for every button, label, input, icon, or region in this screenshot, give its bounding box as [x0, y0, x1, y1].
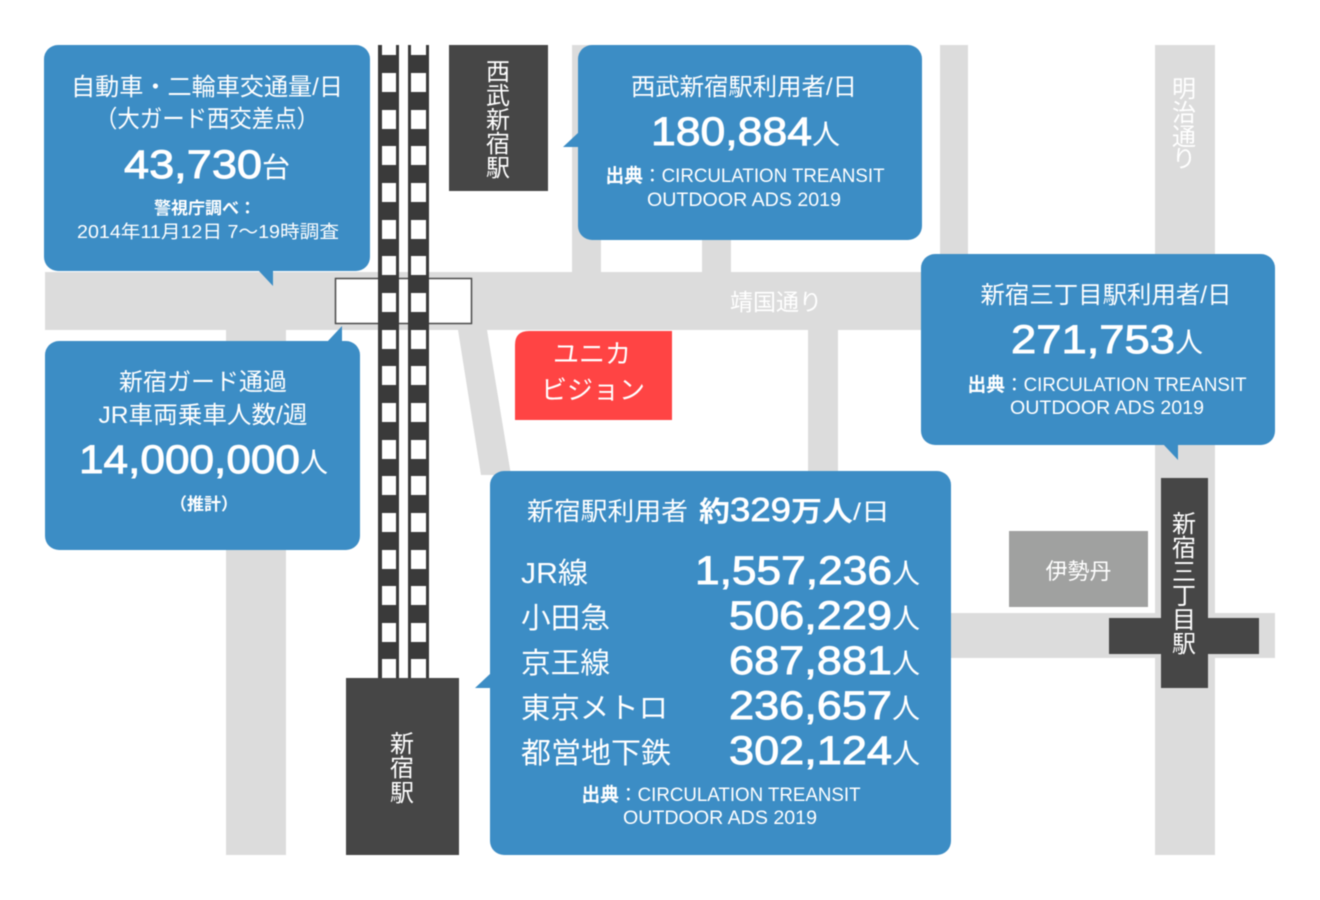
row: JR: 1,557,236 [695, 549, 892, 593]
panel: Seibu-Shinjuku callout: OUTDOOR ADS 2019 [647, 190, 841, 211]
row: Odakyu: 人 [892, 603, 920, 634]
panel: Seibu-Shinjuku callout [563, 45, 922, 240]
row: JR: JR線 [521, 557, 588, 590]
panel: road traffic callout: 警視庁調べ： [154, 199, 256, 218]
railway tracks [378, 45, 429, 678]
panel: Shinjuku-sanchome callout: OUTDOOR ADS 2019 [1010, 398, 1204, 419]
panel: Shinjuku-sanchome callout: 271,753 [1011, 318, 1175, 362]
row: Keio: 京王線 [521, 647, 610, 680]
panel: road traffic callout: 台 [262, 152, 290, 183]
heading: Shinjuku station daily users: 新宿駅利用者 [527, 498, 688, 526]
station: Shinjuku-sanchome: 丁 [1172, 583, 1196, 610]
station: Seibu-Shinjuku: 宿 [486, 131, 510, 158]
road label: Meiji-dori: り [1172, 146, 1196, 173]
panel: Seibu-Shinjuku callout: 180,884 [651, 110, 812, 154]
panel: road traffic callout: （大ガード西交差点） [95, 106, 319, 133]
building: Isetan [1009, 531, 1148, 607]
panel: road traffic callout: 2014年11月12日 7〜19時調査 [77, 222, 339, 242]
station: Shinjuku-sanchome: 新 [1172, 511, 1196, 538]
row: Odakyu: 506,229 [729, 594, 892, 638]
road label: Meiji-dori: 通 [1172, 124, 1196, 151]
panel: JR passengers callout: 14,000,000 [79, 438, 300, 482]
station: Shinjuku-sanchome [1109, 478, 1259, 688]
location: Unica Vision [515, 331, 672, 420]
row: Odakyu [521, 594, 920, 638]
station: Seibu-Shinjuku [449, 45, 548, 191]
heading: Shinjuku station daily users: 約329万人 [699, 491, 853, 528]
row: Tokyo Metro: 人 [892, 693, 920, 724]
panel: JR passengers callout: 人 [300, 447, 328, 478]
row: Tokyo Metro [521, 684, 920, 728]
panel: Shinjuku-sanchome callout: 人 [1175, 327, 1203, 358]
heading: Shinjuku station daily users: /日 [853, 499, 890, 526]
row: Toei subway: 都営地下鉄 [521, 737, 671, 770]
panel: JR passengers callout: 新宿ガード通過 [119, 369, 287, 396]
row: Toei subway: 302,124 [729, 729, 892, 773]
panel: Shinjuku station users [475, 471, 951, 855]
panel: JR passengers callout: （推計） [170, 495, 238, 514]
station: Seibu-Shinjuku: 武 [486, 83, 510, 110]
panel: road traffic callout [44, 45, 370, 286]
panel: road traffic callout: 43,730 [124, 143, 262, 187]
station: Seibu-Shinjuku: 新 [486, 107, 510, 134]
building: Isetan: 伊勢丹 [1045, 559, 1112, 584]
row: Keio: 人 [892, 648, 920, 679]
station: Shinjuku-sanchome: 三 [1172, 559, 1196, 586]
road label: Meiji-dori: 明 [1172, 76, 1196, 103]
station: Seibu-Shinjuku: 駅 [486, 155, 510, 182]
station: Shinjuku [346, 678, 459, 855]
road: Meiji-dori and east street [950, 45, 1275, 855]
row: JR: 人 [892, 558, 920, 589]
row: Toei subway: 人 [892, 738, 920, 769]
station: Shinjuku-sanchome: 宿 [1172, 535, 1196, 562]
road: Yasukuni-dori and side streets [45, 45, 968, 855]
heading: Shinjuku station daily users [527, 491, 890, 528]
panel: JR passengers callout [45, 326, 360, 550]
location: Unica Vision: ユニカ [553, 339, 631, 369]
row: Tokyo Metro: 東京メトロ [521, 692, 668, 725]
road label: Meiji-dori: 治 [1172, 100, 1196, 127]
railway underpass box [336, 278, 472, 324]
source note [582, 784, 861, 829]
road label: Yasukuni-dori: 靖国通り [730, 289, 822, 315]
panel: JR passengers callout: JR車両乗車人数/週 [98, 402, 308, 429]
station: Shinjuku: 新 [390, 731, 414, 758]
row: Keio [521, 639, 920, 683]
station: Shinjuku: 宿 [390, 755, 414, 782]
road label: Meiji-dori [1172, 76, 1196, 173]
source note: OUTDOOR ADS 2019 [623, 808, 817, 829]
panel: Shinjuku-sanchome callout [921, 254, 1275, 460]
station: Shinjuku-sanchome: 駅 [1172, 631, 1196, 658]
location: Unica Vision: ビジョン [541, 375, 645, 405]
panel: road traffic callout: 自動車・二輪車交通量/日 [71, 74, 343, 101]
row: Toei subway [521, 729, 920, 773]
row: Keio: 687,881 [729, 639, 892, 683]
source note: 出典：CIRCULATION TREANSIT [582, 784, 861, 806]
panel: Seibu-Shinjuku callout: 人 [812, 119, 840, 150]
panel: Seibu-Shinjuku callout: 出典：CIRCULATION TREANSIT [606, 165, 885, 187]
station: Seibu-Shinjuku: 西 [486, 59, 510, 86]
row: Odakyu: 小田急 [521, 602, 610, 635]
row: JR [521, 549, 920, 593]
station: Shinjuku-sanchome: 目 [1172, 607, 1196, 634]
panel: Seibu-Shinjuku callout: 西武新宿駅利用者/日 [631, 74, 857, 101]
station: Shinjuku: 駅 [390, 780, 414, 807]
panel: Shinjuku-sanchome callout: 新宿三丁目駅利用者/日 [980, 282, 1232, 309]
row: Tokyo Metro: 236,657 [729, 684, 892, 728]
panel: Shinjuku-sanchome callout: 出典：CIRCULATION TREANSIT [968, 374, 1247, 396]
